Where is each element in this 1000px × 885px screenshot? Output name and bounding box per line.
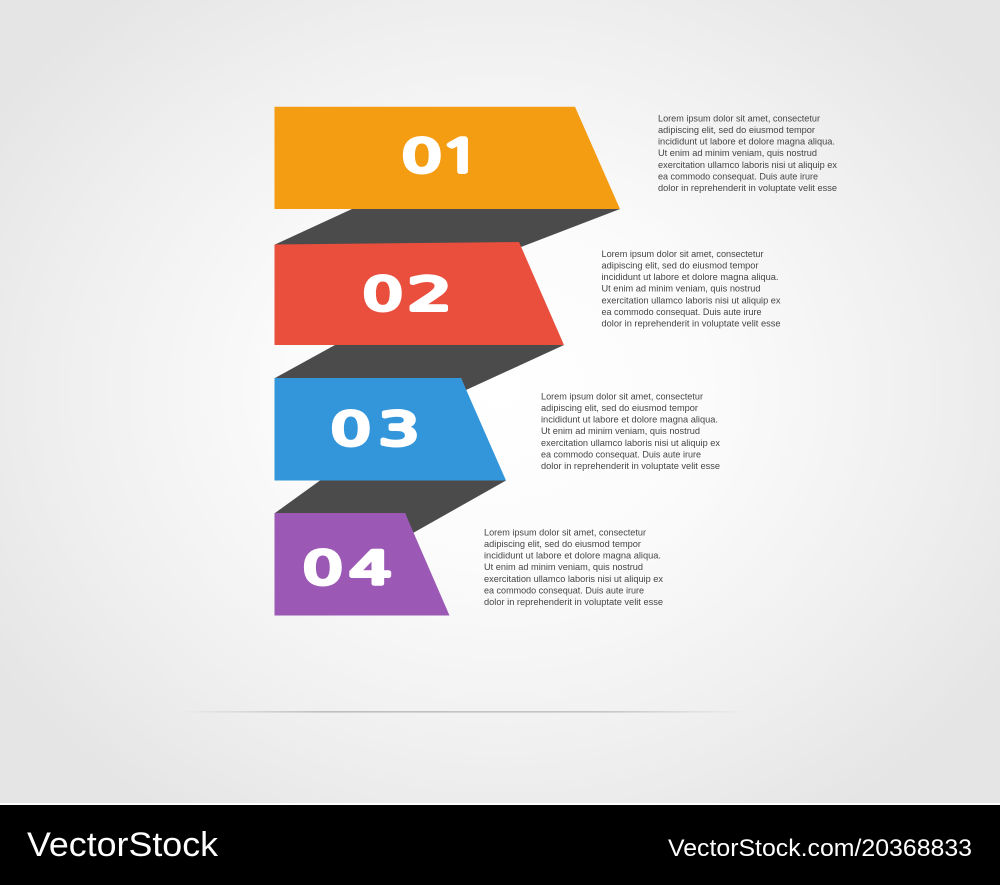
footer logo: VectorStock [27,826,219,864]
number 04 [302,542,392,595]
text block 4: dolor in reprehenderit in voluptate velit esse [484,596,663,607]
text block 1: incididunt ut labore et dolore magna aliqua. [658,136,835,147]
fold shadow 1 [275,209,620,247]
white separator [0,803,1000,805]
text block 3: exercitation ullamco laboris nisi ut aliquip ex [541,437,720,448]
number 01 [402,131,481,183]
text block 2: Ut enim ad minim veniam, quis nostrud [602,283,760,294]
text block 1: Lorem ipsum dolor sit amet, consectetur [658,112,820,124]
text block 3: incididunt ut labore et dolore magna aliqua. [541,414,718,425]
ground shadow [180,711,750,713]
text block 1: dolor in reprehenderit in voluptate velit esse [658,182,837,193]
number 02 [362,269,452,321]
text block 2: exercitation ullamco laboris nisi ut aliquip ex [602,294,781,306]
ribbon 01 [274,107,620,209]
ribbon 03 [274,378,506,480]
text block 4: incididunt ut labore et dolore magna aliqua. [484,550,661,561]
text block 1: adipiscing elit, sed do eiusmod tempor [658,124,815,135]
number 02: 0 [362,269,403,321]
text block 2: ea commodo consequat. Duis aute irure [602,306,762,317]
number 03: 3 [378,404,419,456]
text block 3: Ut enim ad minim veniam, quis nostrud [541,425,700,436]
text block 3: Lorem ipsum dolor sit amet, consectetur [541,390,703,402]
number 04: 4 [349,542,392,595]
text block 1: Ut enim ad minim veniam, quis nostrud [658,147,817,158]
text block 1 [658,112,837,193]
text block 3: ea commodo consequat. Duis aute irure [541,448,701,460]
text block 2: incididunt ut labore et dolore magna aliqua. [602,271,778,282]
footer bar [0,805,1000,885]
text block 2: adipiscing elit, sed do eiusmod tempor [602,260,758,270]
text block 2: Lorem ipsum dolor sit amet, consectetur [602,248,764,259]
number 03 [330,404,419,456]
text block 3: adipiscing elit, sed do eiusmod tempor [541,402,698,413]
text block 4: Ut enim ad minim veniam, quis nostrud [484,561,643,572]
ribbon 02 [274,242,564,345]
fold shadow 2 [275,345,564,390]
text block 4: ea commodo consequat. Duis aute irure [484,584,644,596]
number 03: 0 [330,404,371,456]
text block 3 [541,390,720,471]
text block 4: Lorem ipsum dolor sit amet, consectetur [484,526,646,538]
number 01: 1 [440,134,481,179]
number 02: 2 [408,269,452,321]
text block 4 [484,526,663,607]
number 04: 0 [302,543,343,595]
text block 4: exercitation ullamco laboris nisi ut aliquip ex [484,573,663,584]
ribbon 04 [274,513,450,616]
text block 2: dolor in reprehenderit in voluptate velit esse [602,318,780,328]
text block 2 [602,248,781,328]
text block 3: dolor in reprehenderit in voluptate velit esse [541,460,720,471]
footer url: VectorStock.com/20368833 [668,835,972,862]
number 01: 0 [402,131,442,183]
text block 1: ea commodo consequat. Duis aute irure [658,170,818,182]
fold shadow 3 [275,480,506,533]
text block 1: exercitation ullamco laboris nisi ut aliquip ex [658,159,837,170]
text block 4: adipiscing elit, sed do eiusmod tempor [484,538,641,549]
